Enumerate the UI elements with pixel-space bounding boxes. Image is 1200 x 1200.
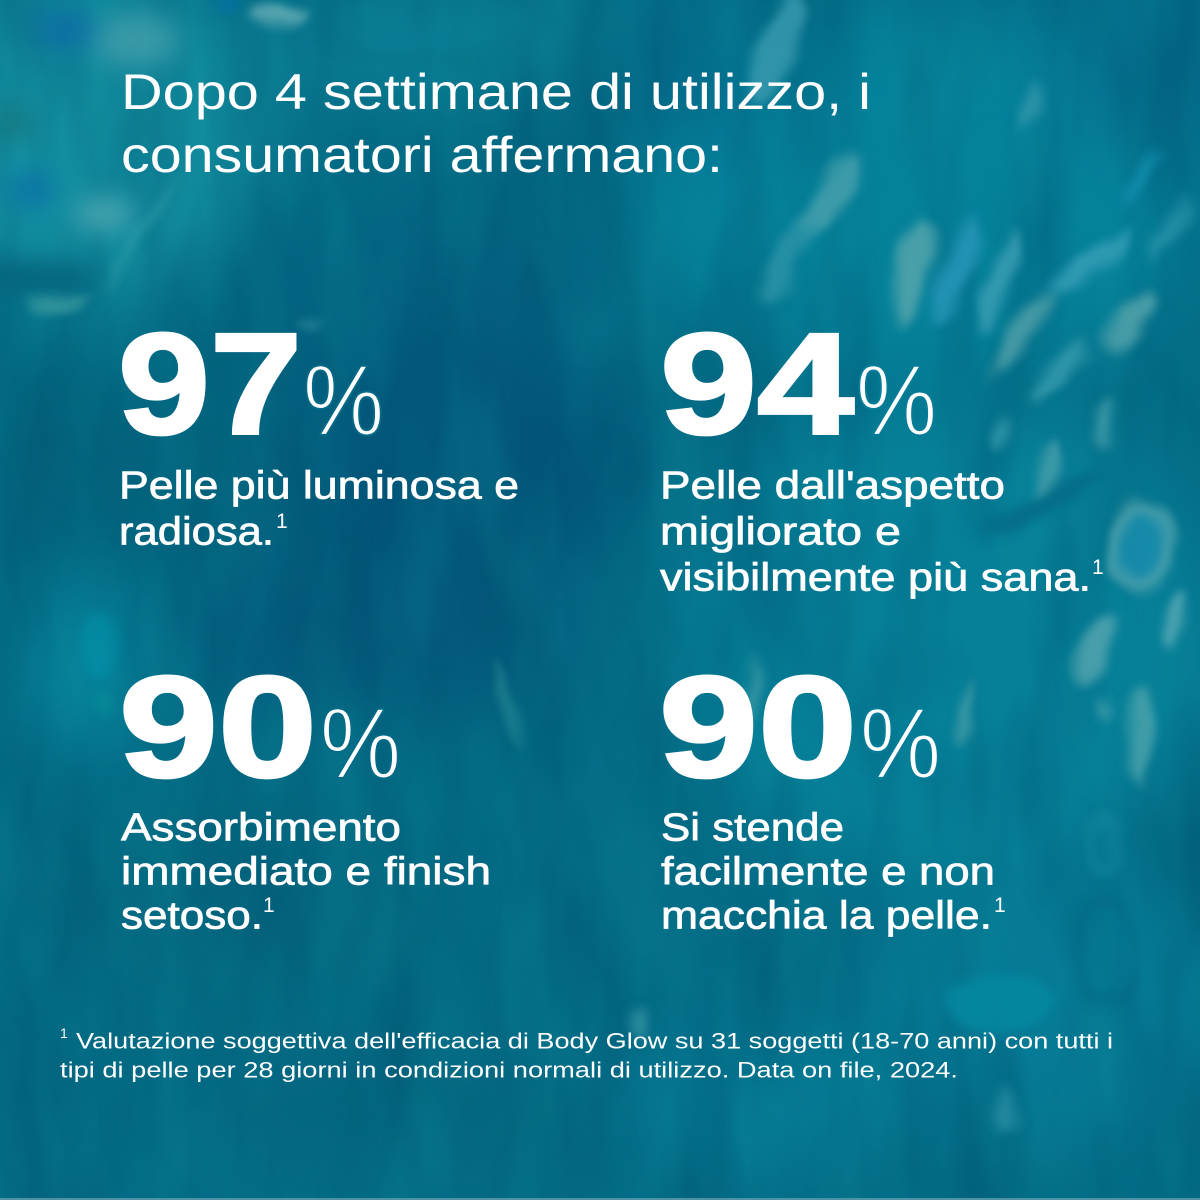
number: 90% left: % [320,688,401,800]
number: 97%: % [303,345,384,457]
number: 90% right: 90 [659,646,857,808]
description: 90% left [121,806,491,938]
description: 94%: migliorato e [660,510,901,554]
number: 90% left: 90 [119,646,317,808]
title: consumatori affermano: [121,127,723,183]
description: 90% left: 1 [263,894,275,917]
number: 90% right [659,646,941,808]
description: 90% left: immediato e finish [121,850,491,894]
description: 94% [660,464,1104,600]
title [121,64,871,183]
footnote: tipi di pelle per 28 giorni in condizioni normali di utilizzo. Data on file, 2024. [60,1058,958,1082]
stat: 94% [660,304,1104,600]
description: 90% right: 1 [994,894,1006,917]
number: 94% [660,304,937,464]
title: Dopo 4 settimane di utilizzo, i [121,64,871,120]
description: 97% [119,464,519,554]
description: 94%: 1 [1092,556,1104,579]
description: 97%: 1 [276,510,288,533]
number: 94%: % [856,345,937,457]
description: 90% right: macchia la pelle. [661,894,992,938]
description: 97%: Pelle più luminosa e [119,464,519,508]
footnote: Valutazione soggettiva dell'efficacia di Body Glow su 31 soggetti (18-70 anni) con tutti i [76,1028,1113,1054]
description: 90% right: Si stende [661,806,844,850]
stat: 97% [118,304,519,554]
number: 90% left [119,646,401,808]
description: 90% left: setoso. [121,894,263,938]
footnote [60,1025,1113,1082]
description: 94%: Pelle dall'aspetto [660,464,1005,508]
footnote: 1 [60,1025,68,1041]
stat: 90% assorbimento [119,646,491,938]
number: 97% [118,304,384,464]
description: 90% right: facilmente e non [661,850,995,894]
description: 94%: visibilmente più sana. [660,556,1091,600]
description: 90% right [661,806,1006,938]
description: 90% left: Assorbimento [121,806,401,850]
number: 97%: 97 [118,304,302,464]
number: 94%: 94 [660,304,854,464]
number: 90% right: % [860,688,941,800]
description: 97%: radiosa. [119,510,274,554]
stat: 90% si stende [659,646,1006,938]
